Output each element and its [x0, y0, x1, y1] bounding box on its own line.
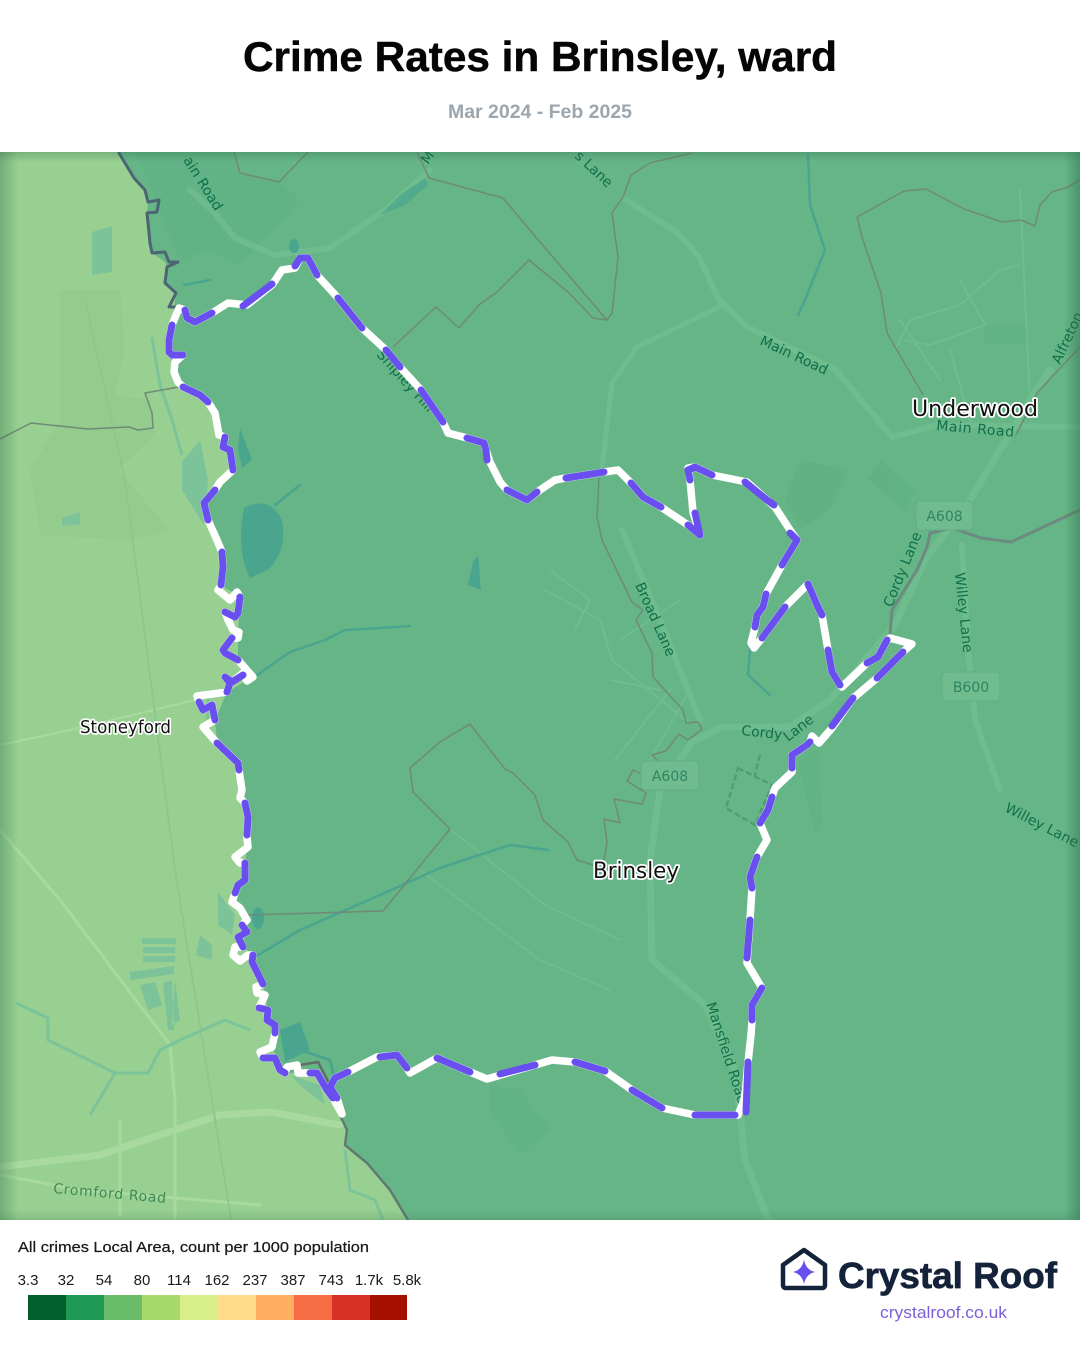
map: thin administrative boundaries [0, 152, 1080, 915]
map panel [0, 148, 1080, 1225]
map base: higher-rate dark green area [120, 152, 1080, 1220]
legend tick labels: 162 [204, 1272, 230, 1289]
road label: top M fragment: M [418, 148, 438, 167]
map: building outline near Cordy Lane [726, 755, 772, 825]
road shield: A608 north: A608 [926, 509, 963, 525]
legend [18, 1239, 422, 1320]
road shield: B600 [942, 672, 1000, 701]
map: water features [238, 178, 481, 1062]
legend tick labels: 32 [58, 1272, 74, 1289]
road label: Lane segment: Lane [781, 712, 817, 745]
ward boundary: purple dashes [169, 258, 903, 1115]
map edge vignette [0, 152, 1080, 1220]
road label: Cordy Lane north: Cordy Lane [881, 530, 925, 609]
legend tick labels: 114 [167, 1272, 191, 1289]
legend tick labels: 80 [134, 1272, 150, 1289]
legend tick labels [18, 1272, 422, 1289]
legend tick labels: 54 [96, 1272, 112, 1289]
map texture: woodland patches [135, 152, 1028, 1155]
road shield: A608 south [641, 761, 699, 790]
map: thick district boundaries [119, 153, 1080, 1220]
legend tick labels: 1.7k [355, 1272, 384, 1289]
ward boundary: white base line [169, 258, 912, 1115]
place label: Underwood: Underwood [912, 397, 1038, 422]
logo url: crystalroof.co.uk [880, 1304, 1008, 1322]
road label: Lane top: s Lane [571, 148, 616, 191]
legend title: All crimes Local Area, count per 1000 population [18, 1239, 369, 1256]
road shield: A608 north [916, 501, 973, 530]
legend tick labels: 387 [280, 1272, 306, 1289]
legend tick labels: 237 [242, 1272, 268, 1289]
map: roads [190, 170, 1080, 1225]
legend tick labels: 743 [318, 1272, 344, 1289]
title: Crime Rates in Brinsley, ward [243, 33, 837, 80]
road label: Mansfield Road: Mansfield Road [702, 1000, 750, 1106]
place label: Stoneyford: Stoneyford [80, 717, 171, 738]
road shield: A608 south: A608 [652, 769, 688, 785]
icon: house with star [783, 1250, 825, 1288]
road label: Cordy Lane: Cordy [741, 723, 783, 743]
road label: Willey Lane north: Willey Lane [951, 572, 975, 653]
logo wordmark: Crystal Roof [838, 1255, 1058, 1296]
map area: lighter green lower-rate zone to the west [0, 152, 408, 1220]
legend colour scale [28, 1295, 407, 1320]
place label: Brinsley: Brinsley [593, 859, 679, 884]
road label: Main Road north-west: ain Road [180, 154, 225, 214]
legend tick labels: 3.3 [18, 1272, 38, 1289]
road shield: B600: B600 [953, 680, 989, 696]
road label: Cromford Road: Cromford Road [53, 1181, 167, 1207]
road label: Willey Lane south: Willey Lane [1002, 800, 1080, 851]
road label: Main Road Underwood: Main Road [936, 418, 1015, 441]
road label: Broad Lane: Broad Lane [631, 580, 678, 659]
logo: Crystal Roof [783, 1250, 1058, 1322]
subtitle: date range: Mar 2024 - Feb 2025 [448, 102, 632, 123]
road label: Shipley Hill: Shipley Hill [373, 347, 437, 416]
legend tick labels: 5.8k [393, 1272, 422, 1289]
road label: Main Road: Main Road [757, 333, 830, 378]
